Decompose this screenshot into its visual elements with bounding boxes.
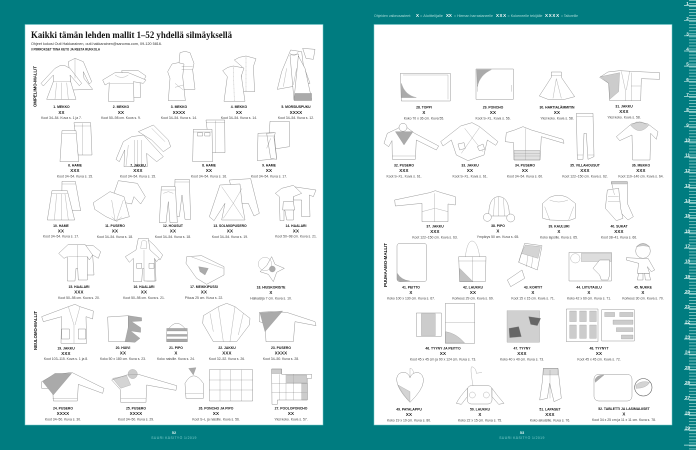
captions: right row 6: Koot 34 x 25 cm ja 11 x 11 cm. Kuva s. 78. (592, 418, 656, 422)
captions: left row 5: XX (120, 350, 126, 356)
captions: right row 6: 50. LAUKKU (470, 408, 491, 412)
icon: flower 18 (258, 257, 284, 282)
icon: collar 39 (543, 195, 575, 221)
icon: trousers 12 (159, 179, 191, 223)
icon: cushion and blanket 46 (416, 303, 475, 343)
captions: right row 4: Korkeus 29 cm. Kuva s. 69. (452, 296, 494, 300)
captions: left row 4: XXX (74, 290, 84, 294)
footer: right page: SUURI KÄSITYÖ 1/2019 (499, 436, 545, 440)
captions: right row 1: Koko 70 x 36 cm. Kuva 55. (404, 116, 444, 120)
captions: left row 4: XX (141, 290, 147, 294)
captions: right row 2: Koot S–XL. Kuva s. 61. (386, 174, 422, 178)
captions: left row 1: XX (58, 110, 65, 115)
ruler: 19 (685, 274, 690, 279)
captions: right row 5: Koot 45 x 45 cm ja 90 x 124 cm. Kuva s. 73. (410, 358, 476, 362)
captions: left row 1: 3. MEKKO (171, 105, 188, 109)
captions: right row 1: 31. JAKKU (615, 104, 633, 108)
captions: right row 6: 52. TABLETTI JA LASIMALIISET (598, 407, 651, 411)
captions: left row 3: 12. HOUSUT (163, 224, 184, 228)
captions: left row 5: Koot 34–50. Kuva s. 28. (263, 357, 299, 361)
captions: left row 3: Koot 34–54. Kuva s. 19. (212, 235, 248, 239)
icon: skirt 10 (47, 181, 81, 220)
captions: left row 6: 27. POOLOPONCHO (275, 406, 308, 410)
footer: left page: 52 (172, 430, 177, 435)
icon: tote 42 (459, 241, 486, 282)
captions: right row 4: Koko 100 x 130 cm. Kuva s. 67. (387, 296, 435, 300)
captions: left row 1: XXXX (290, 110, 302, 115)
captions: right row 6: Koko 22 x 15 cm. Kuva s. 75. (458, 418, 502, 422)
ruler: 7 (686, 92, 689, 97)
icon: mittens 51 (540, 368, 561, 402)
captions: right row 2: Koot 34–54. Kuva s. 60. (507, 174, 543, 178)
footer: right page (499, 430, 545, 440)
section label: puuhaamo: PUUHAAMO-MALLIT (383, 243, 388, 287)
captions: left row 5: XXX (61, 351, 71, 356)
ruler: 18 (685, 259, 690, 264)
captions: left row 3: Koot 34–54. Kuva s. 18. (97, 235, 133, 239)
icon: scarf 20 (108, 316, 142, 342)
icon: cushions 48 (566, 309, 634, 342)
captions: left row 2: Koot 34–54. Kuva s. 16. (191, 174, 227, 178)
icon: overall 14 (275, 185, 316, 221)
captions: left row 3: Koot 50–98 cm. Kuva s. 21. (275, 234, 317, 238)
captions: right row 4: X (409, 290, 413, 295)
icon: tablet case 52 (594, 374, 652, 401)
icon: dress 36 (616, 122, 658, 160)
ruler: 15 (685, 213, 690, 218)
icon: twist blouse 13 (209, 179, 259, 221)
difficulty legend: Ohjeiden vaikeusasteet: (374, 13, 411, 18)
captions: right row 6: 49. PATALAPPU (396, 408, 422, 412)
captions: right row 2: Koot S–XL. Kuva s. 61. (452, 174, 488, 178)
captions: left row 2: Koot 34–54. Kuva s. 17. (251, 174, 287, 178)
difficulty legend: = Kokeneelle tekijälle (508, 13, 543, 18)
captions: left row 1: 2. MEKKO (113, 105, 130, 109)
ruler: 21 (685, 304, 690, 309)
drawings: right page bottom (397, 241, 655, 404)
captions: left row 3: 11. PUSERO (105, 224, 125, 228)
icon: dress 1 (41, 58, 93, 99)
icon: skirt 9 (257, 121, 289, 161)
captions: left row 3: 10. HAME (53, 224, 70, 228)
captions: right row 5: 48. TYYNYT (589, 346, 609, 350)
footer: left page (151, 430, 197, 440)
ruler: 27 (685, 395, 690, 400)
captions: right row 4: 45. NUKKE (634, 286, 653, 290)
captions: right row 5: 47. TYYNY (514, 346, 531, 350)
ruler: 12 (685, 168, 690, 173)
icon: dress 3 (168, 51, 195, 101)
captions: left row 3: XX (58, 228, 64, 234)
icon: socks 40 (605, 182, 633, 221)
captions: left row 4: XX (201, 290, 207, 294)
icon: sweater 24 (42, 372, 104, 401)
captions: left row 5: 23. PUSERO (271, 346, 291, 350)
icon: doll 45 (626, 243, 655, 280)
captions: left row 3: XX (112, 228, 118, 234)
captions: left row 5: Koko 50 x 180 cm. Kuva s. 23. (100, 357, 146, 361)
ruler: 26 (685, 380, 690, 385)
captions: right row 2: XXX (399, 168, 409, 173)
icon: cardigan 37 (395, 191, 455, 222)
footer: right page: 53 (520, 430, 525, 435)
ruler: 28 (685, 410, 690, 415)
ruler: 16 (685, 228, 690, 233)
captions: right row 3: 39. KAULURI (549, 224, 570, 228)
captions: left row 1: 4. MEKKO (231, 105, 248, 109)
ruler: 9 (686, 122, 689, 127)
ruler: 14 (685, 198, 690, 203)
captions: right row 4: X (641, 290, 645, 295)
captions: left row 3: 13. SOLMIOPUSERO (213, 224, 247, 228)
captions: right row 2: 33. JAKKU (461, 164, 479, 168)
captions: right row 1: Koot S–XL. Kuva s. 56. (475, 116, 511, 120)
ruler: 29 (685, 426, 690, 430)
panel: left page (25, 24, 323, 425)
ruler: 11 (685, 153, 690, 158)
captions: right row 2: XXX (580, 168, 590, 173)
difficulty legend: XX (446, 13, 452, 18)
icon: jacket 33 (441, 123, 498, 161)
captions: left row 3: XX (227, 228, 233, 234)
captions: right row 2: 34. PUSERO (515, 164, 535, 168)
captions: right row 4: 43. KORTIT (524, 286, 543, 290)
difficulty legend (374, 13, 579, 18)
icon: overall 16 (125, 238, 163, 282)
drawings: left page bottom (42, 238, 316, 404)
captions: left row 6: Koot 34–50. Kuva s. 30. (45, 418, 81, 422)
captions: left row 6: 24. PUSERO (53, 406, 73, 410)
icon: cape 30 (539, 72, 575, 99)
captions: right row 3: 38. PIPO (491, 224, 505, 228)
captions: left row 6: 26. PONCHO JA PIPO (199, 406, 234, 410)
icon: blouse 11 (93, 181, 145, 222)
captions: left row 5: XXXX (275, 350, 287, 356)
captions: left row 1: Koot 34–54. Kuva s. 14. (161, 116, 197, 120)
captions: right row 4: Koot 15 x 15 cm. Kuva s. 71. (511, 296, 555, 300)
captions: right row 5: XX (596, 351, 602, 356)
captions: left row 5: X (174, 350, 178, 356)
captions: right row 4: 44. LIITUTAULU (576, 286, 602, 290)
captions: right row 3: X (557, 229, 561, 234)
ruler: 8 (686, 107, 689, 112)
captions: right row 1 (404, 104, 641, 120)
captions: left row 4: 17. MEIKKIPUSSI (190, 285, 218, 289)
captions: right row 5: Koot 45 x 45 cm. Kuva s. 72. (577, 358, 621, 362)
captions: left row 2: 9. HAME (262, 164, 277, 168)
section label: neulomo: NEULOMO-MALLIT (33, 311, 38, 350)
captions: left row 1: Koot 34–54. Kuva s. 12. (278, 116, 314, 120)
captions: right row 6: Koko aikuisille. Kuva s. 76. (530, 418, 570, 422)
section label: ompelimo: OMPELIMO-MALLIT (32, 66, 38, 107)
drawings: left page top (41, 48, 316, 223)
captions: left row 4: Koot 50–98 cm. Kuva s. 20. (58, 296, 100, 300)
icon: pants 35 (576, 113, 594, 159)
captions: left row 2: Koot 34–54. Kuva s. 15. (120, 174, 156, 178)
ruler: 13 (685, 183, 690, 188)
captions: left row 6: 25. PUSERO (126, 406, 146, 410)
icon: cardigan 31 (600, 71, 660, 101)
captions: right row 3: Koot 122–150 cm. Kuva s. 63. (412, 236, 458, 240)
captions: left row 2: XXX (70, 168, 80, 173)
intro text: Ohjeet kokosi Outi Hakkarainen, outi.hakkarainen@sanoma.com, 09-120 5816. (31, 41, 162, 46)
captions: left row 1: XXXX (173, 110, 185, 115)
captions: right row 3: XXX (430, 229, 440, 234)
captions: left row 2: 7. JAKKU (130, 164, 146, 168)
captions: right row 6: 51. LAPASET (539, 408, 562, 412)
captions: right row 3: Koot 38–41. Kuva s. 66. (601, 236, 637, 240)
icon: skirt 6 (60, 123, 92, 162)
title: Kaikki tämän lehden mallit 1–52 yhdellä silmäyksellä (31, 31, 232, 41)
captions: left row 2: XXX (133, 168, 143, 173)
captions: right row 5: XXX (517, 351, 527, 356)
captions: right row 1: X (422, 110, 426, 115)
captions: left row 4: Pituus 25 cm. Kuva s. 22. (185, 296, 223, 300)
ruler: 5 (686, 62, 689, 67)
captions: right row 6: XXX (545, 412, 555, 417)
icon: jacket 7 (116, 125, 171, 167)
captions: right row 1: XX (490, 110, 496, 115)
difficulty legend: = Taitureille (561, 13, 579, 18)
captions: right row 5: Koko 40 x 40 cm. Kuva s. 73. (500, 358, 544, 362)
captions: left row 1: Koot 34–54. Kuva s. 14. (221, 116, 257, 120)
captions: right row 4: 41. PEITTO (402, 286, 420, 290)
icon: blanket 41 (397, 243, 427, 282)
captions: left row 6: Koot S–L ja naisille. Kuva s. 56. (192, 418, 240, 422)
captions: right row 6: X (478, 412, 482, 417)
ruler: 6 (686, 77, 689, 82)
captions: left row 4: X (269, 290, 273, 295)
captions: right row 4 (387, 286, 664, 300)
captions: right row 2: XX (467, 168, 473, 173)
captions: left row 3 (43, 224, 317, 239)
captions: right row 1: 28. TOPPI (416, 106, 432, 110)
captions: right row 2: 32. PUSERO (394, 164, 414, 168)
icon: cushion 47 (507, 311, 541, 342)
captions: right row 4: 42. LAUKKU (463, 286, 484, 290)
captions: left row 6: XX (213, 411, 219, 416)
captions: left row 4: Halkaisija 7 cm. Kuva s. 10. (250, 296, 292, 300)
icon: dress 2 (103, 71, 146, 101)
captions: left row 6: XXXX (57, 411, 69, 416)
ruler: 3 (686, 31, 689, 36)
captions: left row 2: 6. HAME (68, 164, 83, 168)
captions: left row 5: 20. HUIVI (116, 346, 130, 350)
captions: left row 3: Koot 34–54. Kuva s. 17. (43, 234, 79, 238)
captions: left row 1: 1. MEKKO (53, 105, 70, 109)
captions: right row 3: Ympärys 50 cm. Kuva s. 65. (477, 235, 519, 239)
captions: left row 2: XX (266, 168, 272, 173)
ruler (684, 0, 696, 450)
captions: left row 4: 18. HIUSKORISTE (257, 286, 286, 290)
icon: poncho 27 (272, 369, 312, 404)
icon: beanie 38 (483, 197, 515, 222)
captions: right row 3: XXX (614, 229, 624, 234)
icon: bag 50 (456, 367, 504, 404)
captions: right row 1: Yksi koko. Kuva s. 58. (607, 116, 641, 120)
icon: sweater 23 (259, 311, 316, 342)
captions: left row 5: XXX (222, 350, 232, 356)
icon: boxes 43 (507, 243, 542, 287)
captions: right row 5: XX (440, 351, 446, 356)
ruler: 24 (685, 350, 690, 355)
ruler: 1 (686, 1, 689, 6)
captions: right row 6 (387, 407, 656, 422)
ruler: 17 (685, 244, 690, 249)
captions: left row 2: Koot 34–54. Kuva s. 15. (57, 174, 93, 178)
icon: overall 15 (59, 244, 101, 281)
ruler: 23 (685, 334, 690, 340)
captions: left row 3: XX (293, 228, 299, 234)
icon: shawl 28 (400, 73, 450, 101)
captions: left row 4 (58, 285, 292, 300)
difficulty legend: = Aloittelijalle (420, 13, 444, 18)
captions: left row 6: XX (288, 411, 294, 416)
captions: left row 2: 8. HAME (202, 164, 217, 168)
captions: right row 2: 36. MEKKO (632, 164, 650, 168)
difficulty legend: XXXX (545, 13, 559, 18)
captions: left row 4: 15. HAALARI (69, 285, 90, 289)
captions: left row 5: Koot 32–52. Kuva s. 26. (209, 357, 245, 361)
captions: right row 4: X (531, 290, 535, 295)
captions: right row 3: 37. JAKKU (426, 224, 444, 228)
captions: left row 2 (57, 164, 287, 178)
captions: right row 5: 46. TYYNY JA PEITTO (425, 346, 461, 350)
footer: left page: SUURI KÄSITYÖ 1/2019 (151, 436, 197, 440)
captions: left row 6: Yksi koko. Kuva s. 57. (274, 418, 308, 422)
ruler: 2 (686, 16, 689, 21)
drawings: right page top (384, 69, 660, 222)
captions: right row 3: X (496, 228, 500, 234)
icon: wedding dress 5 (277, 48, 315, 101)
icon: sweater 32 (384, 123, 439, 159)
icon: beanie 21 (167, 323, 187, 342)
icon: heart potholder 49 (397, 368, 423, 402)
captions: right row 4: Korkeus 30 cm. Kuva s. 70. (622, 296, 664, 300)
icon: skirt 8 (193, 120, 225, 162)
captions: left row 1 (41, 105, 314, 120)
captions: left row 5: 19. JAKKU (57, 346, 75, 350)
difficulty legend: X (416, 13, 419, 18)
ruler: 10 (685, 137, 690, 142)
captions: left row 1: XX (118, 110, 124, 115)
captions: right row 2 (386, 164, 664, 178)
captions: left row 2: XX (206, 168, 212, 173)
captions: right row 1: 29. PONCHO (483, 106, 504, 110)
captions: left row 3: XX (170, 228, 176, 234)
captions: right row 2: Koot 110–140 cm. Kuva s. 64. (618, 174, 664, 178)
captions: right row 1: XXX (619, 109, 629, 114)
panel: right page (374, 24, 672, 425)
captions: right row 1: 30. HARTIALÄMMITIN (539, 106, 575, 110)
captions: left row 5: Koot 103–115. Kuva s. 1 ja 8. (44, 357, 88, 361)
illustration credit: // PIIRROKSET TIINA KETO JA REETA RUKKOLA (31, 48, 100, 52)
ruler: 22 (685, 319, 690, 324)
ruler: 20 (685, 289, 690, 294)
icon: sweater 34 (505, 127, 564, 160)
icon: pouch 17 (186, 256, 224, 284)
ruler: 4 (686, 46, 689, 52)
captions: right row 2: XX (522, 168, 528, 173)
captions: right row 4: X (587, 290, 591, 295)
difficulty legend: = Hieman harrastaneelle (454, 13, 494, 18)
captions: right row 3 (412, 224, 637, 240)
captions: left row 6: Koot 34–50. Kuva s. 29. (118, 418, 154, 422)
captions: right row 2: XXX (636, 168, 646, 173)
captions: right row 1: XX (554, 110, 560, 115)
captions: right row 2: Koot 122–150 cm. Kuva s. 62. (562, 174, 608, 178)
captions: left row 3: 14. HAALARI (286, 224, 307, 228)
captions: right row 6: X (622, 412, 626, 416)
icon: jacket 22 (203, 303, 250, 342)
captions: right row 6: Koko 19 x 19 cm. Kuva s. 80. (387, 418, 431, 422)
icon: poncho and beanie 26 (185, 368, 253, 401)
icon: board 44 (569, 252, 611, 281)
difficulty legend: XXX (496, 13, 506, 18)
captions: left row 1: 5. MORSIUSPUKU (281, 105, 311, 109)
captions: left row 1: Koot 50–98 cm. Kuva s. 9. (101, 116, 141, 120)
icon: cardigan 19 (42, 304, 93, 343)
captions: left row 3: Koot 34–54. Kuva s. 18. (155, 235, 191, 239)
captions: left row 5: Koko naisille. Kuva s. 24. (157, 357, 195, 361)
captions: right row 4: Koko 42 x 60 cm. Kuva s. 71. (567, 296, 611, 300)
captions: right row 1: Yksi koko. Kuva s. 58. (540, 116, 574, 120)
captions: right row 4: XX (470, 290, 476, 295)
captions: left row 4: 16. HAALARI (134, 285, 155, 289)
captions: left row 6 (45, 406, 308, 422)
captions: left row 4: Koot 50–98 cm. Kuva s. 21. (123, 296, 165, 300)
captions: left row 1: XX (236, 110, 242, 115)
captions: right row 3: Koko lapsille. Kuva s. 65. (540, 236, 578, 240)
captions: left row 1: Koot 34–54. Kuva s. 1 ja 7. (41, 116, 82, 120)
captions: right row 5 (410, 346, 621, 362)
captions: right row 3: 40. SUKAT (610, 224, 628, 228)
icon: poncho 29 (476, 69, 513, 99)
captions: left row 6: XXXX (130, 411, 142, 416)
icon: sweater 25 (112, 369, 177, 402)
captions: left row 5: 22. JAKKU (218, 346, 236, 350)
icon: dress 4 (223, 56, 256, 101)
captions: right row 2: 35. VILLAHOUSUT (570, 164, 601, 168)
captions: right row 6: XX (406, 412, 412, 417)
ruler: 25 (685, 365, 690, 370)
captions: left row 5: 21. PIPO (169, 346, 183, 350)
captions: left row 5 (44, 346, 299, 361)
